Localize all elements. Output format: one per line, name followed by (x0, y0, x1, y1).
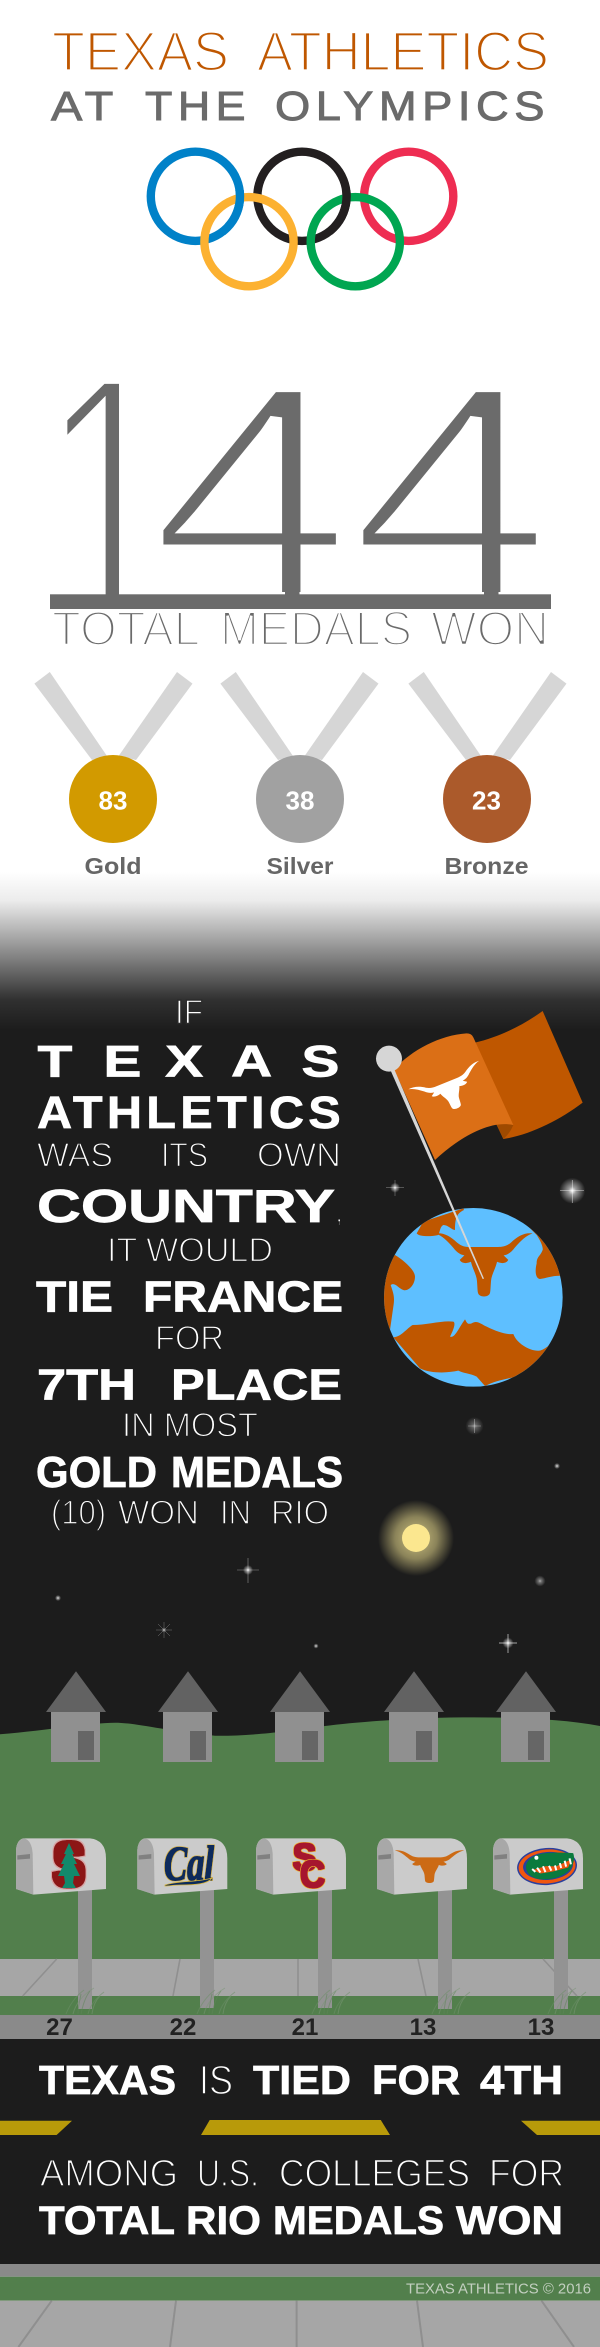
title line: at the Olympics (51, 83, 550, 129)
footer band (0, 2277, 600, 2301)
headline: Texas is tied for 4th: 4TH (480, 2057, 563, 2103)
line: TIE FRANCE: FRANCE (143, 1272, 343, 1322)
sidewalk (0, 1959, 600, 1996)
icon: olympic rings (151, 152, 453, 286)
earth globe (373, 1208, 567, 1387)
mailbox: USC 21 (256, 1837, 350, 2014)
bottom sidewalk (0, 2301, 600, 2347)
big number 144 (50, 384, 551, 609)
text: total Rio medals won: TOTAL (39, 2199, 175, 2243)
medal counts per school: 27 (46, 2014, 73, 2041)
title line: at the Olympics: AT (51, 83, 119, 129)
logo: SC monogram (292, 1837, 325, 1896)
flag (394, 1011, 583, 1160)
logo: SC monogram: C (300, 1854, 325, 1896)
medal: gold: 83 (99, 786, 127, 816)
line: TEXAS: TEXAS (38, 1036, 340, 1086)
title line: at the Olympics: OLYMPICS (275, 83, 550, 129)
road strip (0, 2015, 600, 2039)
text: among U.S. colleges for: FOR (489, 2153, 564, 2195)
line: 7TH PLACE: 7TH (37, 1360, 136, 1410)
headline: Texas is tied for 4th: FOR (372, 2057, 460, 2103)
logo: Cal script: Cal (164, 1835, 214, 1891)
medal: gold (34, 672, 193, 879)
line: was its own: ITS (161, 1136, 208, 1174)
medal counts per school: 22 (170, 2014, 196, 2041)
line: was its own: OWN (257, 1136, 341, 1174)
headline: Texas is tied for 4th: TIED (253, 2057, 351, 2103)
medal: bronze (408, 672, 566, 879)
logo: Stanford S and tree: S (53, 1830, 85, 1898)
line: (10) won in Rio: WON (118, 1494, 199, 1532)
line: GOLD MEDALS: MEDALS (171, 1448, 343, 1497)
big number 144: 1 (39, 303, 177, 695)
line: IF: IF (175, 994, 203, 1032)
line: TIE FRANCE: TIE (36, 1272, 113, 1322)
line: GOLD MEDALS (36, 1448, 343, 1497)
text block: if Texas Athletics was its own country (36, 994, 345, 1532)
dark ranking panel (0, 2039, 600, 2264)
line: 7TH PLACE: PLACE (171, 1360, 342, 1410)
caption: total medals won: MEDALS (220, 603, 412, 656)
houses (46, 1671, 556, 1762)
medal counts per school: 21 (292, 2014, 318, 2041)
mailbox: Florida 13 (493, 1838, 586, 2014)
medal counts per school: 13 (528, 2014, 554, 2041)
line: COUNTRY: , (335, 1196, 343, 1229)
text: among U.S. colleges for: U.S. (197, 2153, 259, 2195)
line: TIE FRANCE (36, 1272, 343, 1322)
medal: bronze: 23 (472, 786, 501, 816)
text: total Rio medals won (39, 2199, 563, 2243)
medal: silver: Silver (266, 853, 334, 879)
text: total Rio medals won: RIO (186, 2199, 261, 2243)
caption: total medals won (52, 603, 549, 656)
caption: total medals won: WON (431, 603, 549, 656)
line: GOLD MEDALS: GOLD (36, 1448, 157, 1497)
title (51, 20, 550, 129)
line: (10) won in Rio: IN (220, 1494, 251, 1532)
mailbox: Texas 13 (377, 1838, 470, 2014)
title line: at the Olympics: THE (145, 83, 251, 129)
text: total Rio medals won: MEDALS (273, 2199, 444, 2243)
line: was its own: WAS (37, 1136, 113, 1174)
mailbox: Stanford 27 (16, 1830, 106, 2014)
medal: silver (220, 672, 378, 879)
gold road stripes (0, 2120, 600, 2135)
medal: bronze: Bronze (444, 853, 528, 879)
flag pole (376, 1046, 484, 1279)
headline: Texas is tied for 4th: TEXAS (39, 2057, 176, 2103)
line: (10) won in Rio: RIO (271, 1494, 329, 1532)
line: COUNTRY: COUNTRY (37, 1180, 335, 1232)
medal: silver: 38 (286, 786, 314, 816)
medal: gold: Gold (84, 853, 142, 879)
title line: Texas Athletics: TEXAS (52, 20, 229, 83)
logo: Cal script (164, 1835, 214, 1891)
logo: SC monogram: S (292, 1837, 316, 1879)
stars (55, 1178, 585, 1653)
line: (10) won in Rio: (10) (51, 1494, 106, 1532)
line: ATHLETICS: ATHLETICS (37, 1087, 345, 1138)
line: (10) won in Rio (51, 1494, 329, 1532)
medal counts per school: 13 (410, 2014, 436, 2041)
line: 7TH PLACE (37, 1360, 342, 1410)
bottom road strip (0, 2264, 600, 2277)
text: total Rio medals won: WON (456, 2199, 563, 2243)
logo: Florida gator (516, 1846, 578, 1887)
title line: Texas Athletics (52, 20, 549, 83)
credit: TEXAS ATHLETICS © 2016 (406, 2281, 591, 2297)
text: among U.S. colleges for: AMONG (40, 2153, 178, 2195)
green hill (0, 1717, 600, 2015)
mailbox: California 22 (137, 1835, 235, 2014)
logo: longhorn (395, 1850, 464, 1883)
line: for: FOR (155, 1320, 224, 1358)
title line: Texas Athletics: ATHLETICS (257, 20, 549, 83)
caption: total medals won: TOTAL (52, 603, 200, 656)
text: among U.S. colleges for (40, 2153, 564, 2195)
line: was its own (37, 1136, 341, 1174)
headline: Texas is tied for 4th: IS (199, 2057, 233, 2103)
text: among U.S. colleges for: COLLEGES (279, 2153, 470, 2195)
icon: earth with Texas flag (373, 1011, 583, 1387)
line: in most: IN MOST (122, 1406, 258, 1444)
big number 144: 44 (149, 322, 553, 662)
medal counts per school (46, 2014, 554, 2041)
icon: glowing sun (378, 1500, 454, 1576)
headline: Texas is tied for 4th (39, 2057, 563, 2103)
line: it would: IT WOULD (107, 1232, 273, 1270)
